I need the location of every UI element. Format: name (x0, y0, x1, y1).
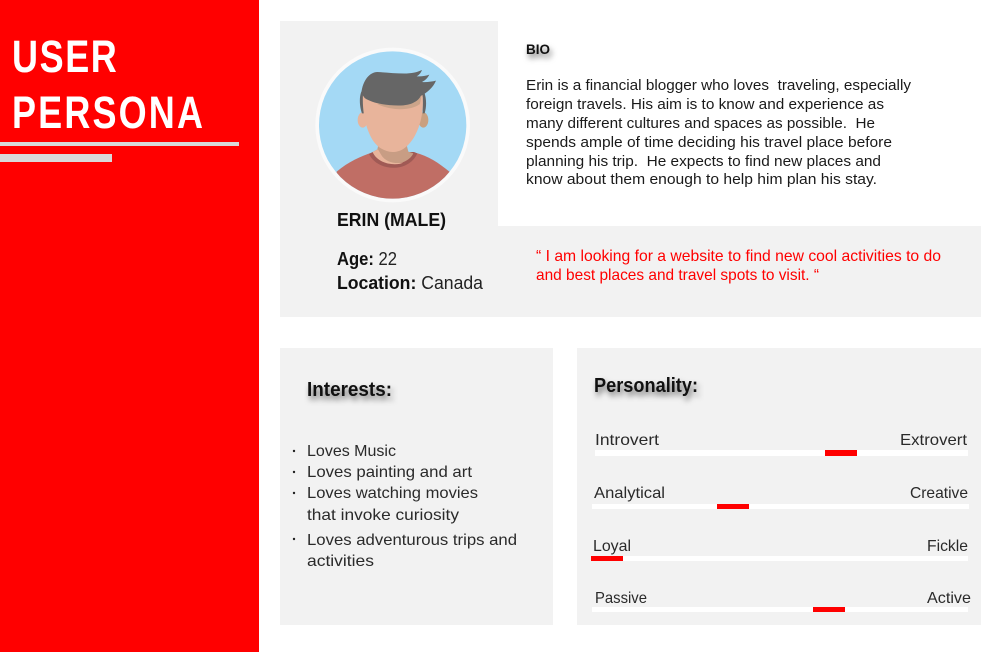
text block: bio: spends ample of time deciding his travel place before (526, 134, 892, 151)
location: Location: Canada (337, 273, 484, 293)
slider: loyal to fickle: Loyal (593, 538, 631, 555)
heading: bio: BIO (526, 41, 550, 57)
list: interests: Loves adventurous trips and (307, 532, 517, 549)
panel: profile (280, 21, 981, 317)
heading: personality: Personality: (594, 375, 698, 397)
slider: passive to active: Active (927, 590, 971, 607)
list: interests: Loves painting and art (307, 464, 473, 481)
slider: loyal to fickle: Fickle (927, 538, 968, 555)
list: interests: activities (307, 553, 374, 570)
slider: analytical to creative: Creative (910, 485, 968, 502)
text block: bio: planning his trip. He expects to find new places and (526, 153, 881, 170)
text block: bio: foreign travels. His aim is to know and experience as (526, 96, 884, 113)
list: interests: Loves watching movies (307, 485, 478, 502)
slider: passive to active (592, 590, 971, 612)
slider: analytical to creative (592, 485, 969, 509)
quote: and best places and travel spots to visit. “ (536, 267, 819, 284)
slider: introvert to extrovert (595, 432, 968, 456)
slider: passive to active: Passive (595, 590, 647, 607)
slider: introvert to extrovert: Extrovert (900, 432, 968, 449)
text block: bio: Erin is a financial blogger who loves traveling, especially (526, 77, 912, 94)
quote (536, 248, 941, 284)
icon: user avatar (315, 48, 470, 203)
quote: “ I am looking for a website to find new cool activities to do (536, 248, 941, 265)
title: PERSONA (12, 87, 205, 138)
text block: bio: know about them enough to help him plan his stay. (526, 171, 877, 188)
slider: introvert to extrovert: Introvert (595, 432, 660, 449)
title (12, 31, 205, 138)
age: Age: 22 (337, 249, 397, 269)
name: ERIN (MALE) (337, 210, 446, 230)
heading: interests: Interests: (307, 379, 392, 401)
slider: loyal to fickle (591, 538, 968, 561)
text block: bio (526, 77, 912, 188)
panel: interests (280, 348, 553, 625)
text block: bio: many different cultures and spaces as possible. He (526, 115, 875, 132)
title: USER (12, 31, 118, 82)
list: interests (293, 443, 517, 570)
list: interests: that invoke curiosity (307, 507, 459, 524)
panel: red sidebar (0, 0, 259, 652)
slider: analytical to creative: Analytical (594, 485, 665, 502)
list: interests: Loves Music (307, 443, 396, 460)
panel: personality (577, 348, 981, 625)
